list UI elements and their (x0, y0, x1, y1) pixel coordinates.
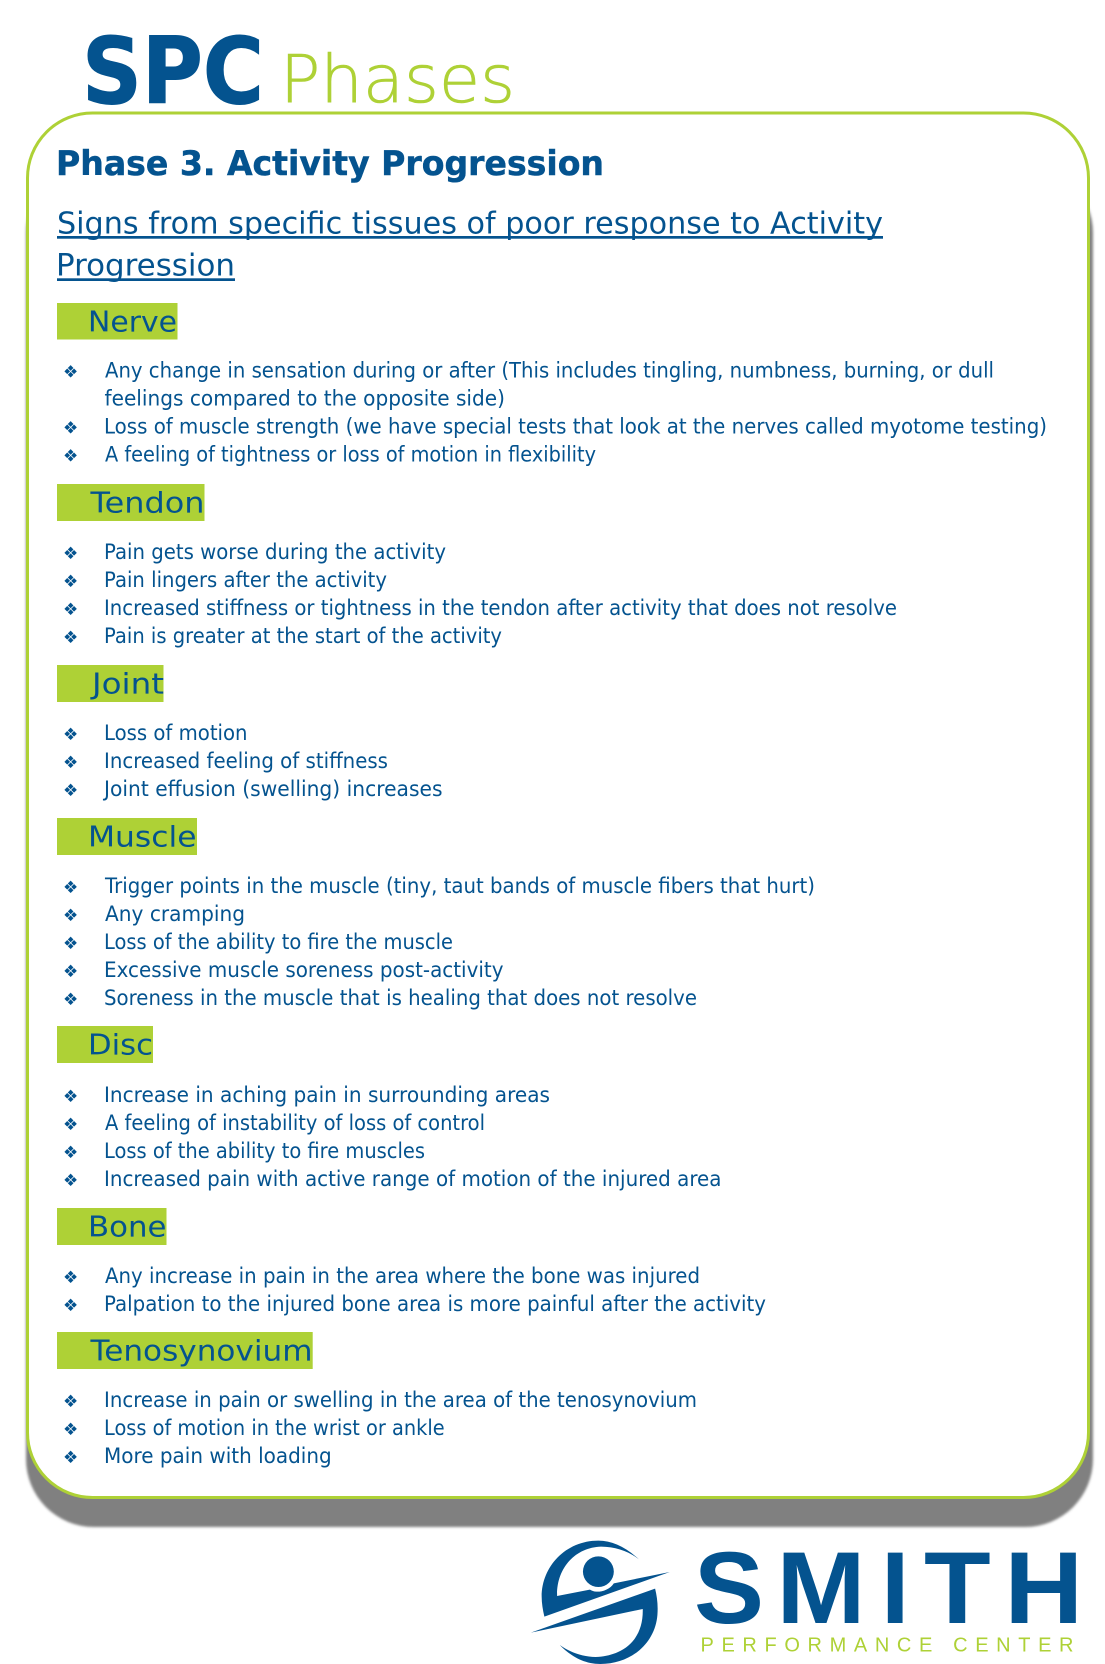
section label: Tenosynovium: Tenosynovium (89, 1334, 312, 1368)
section: Muscle (57, 818, 815, 1010)
Muscle list: ❖ (63, 962, 78, 982)
section label: Bone (57, 1208, 166, 1245)
Bone list: ❖ (63, 1268, 78, 1288)
Joint list: ❖ (63, 781, 78, 801)
Tenosynovium list: ❖ (63, 1420, 78, 1440)
Muscle list: Soreness in the muscle that is healing that does not resolve (104, 986, 697, 1010)
Tenosynovium list (63, 1388, 697, 1468)
Tendon list: ❖ (63, 572, 78, 592)
Tenosynovium list: More pain with loading (104, 1444, 332, 1468)
section: Tenosynovium (57, 1332, 697, 1468)
Bone list: ❖ (63, 1296, 78, 1316)
section label: Nerve (57, 303, 178, 340)
Joint list: ❖ (63, 753, 78, 773)
panel: phase card (28, 113, 1088, 1498)
Disc list: ❖ (63, 1087, 78, 1107)
Disc list: ❖ (63, 1115, 78, 1135)
Joint list: Increased feeling of stiffness (104, 749, 388, 773)
wordmark: SMITH: T (924, 1531, 991, 1645)
section label: Joint: Joint (90, 668, 164, 700)
wordmark: SMITH: M (776, 1531, 866, 1645)
Muscle list: Excessive muscle soreness post-activity (104, 958, 504, 982)
subheading: Progression (56, 248, 235, 284)
Disc list: Loss of the ability to fire muscles (104, 1139, 425, 1163)
Tenosynovium list: ❖ (63, 1392, 78, 1412)
Tendon list (63, 540, 897, 648)
Tendon list: ❖ (63, 600, 78, 620)
section label: Joint (57, 665, 164, 702)
tagline: Performance Center: PERFORMANCE CENTER (700, 1634, 1074, 1656)
Tendon list: Increased stiffness or tightness in the tendon after activity that does not resolve (104, 596, 897, 620)
Disc list (63, 1083, 722, 1191)
Disc list: Increased pain with active range of motion of the injured area (104, 1167, 722, 1191)
section: Tendon (57, 484, 897, 648)
Nerve list (63, 359, 1047, 467)
title: Phases (280, 41, 515, 118)
logo: Smith Performance Center (531, 1531, 1083, 1664)
Muscle list: ❖ (63, 934, 78, 954)
section label: Tendon (57, 484, 204, 521)
Nerve list: ❖ (63, 447, 78, 467)
Tenosynovium list: Loss of motion in the wrist or ankle (104, 1416, 445, 1440)
Tendon list: ❖ (63, 544, 78, 564)
section label: Disc: Disc (88, 1028, 153, 1062)
Disc list: Increase in aching pain in surrounding areas (104, 1083, 550, 1107)
Muscle list: Trigger points in the muscle (tiny, taut bands of muscle fibers that hurt) (104, 874, 815, 898)
Nerve list: A feeling of tightness or loss of motion in flexibility (105, 443, 596, 467)
section: Nerve (57, 303, 1047, 467)
Tendon list: Pain is greater at the start of the activity (104, 624, 502, 648)
subheading: Signs from specific tissues of poor response to Activity (57, 206, 883, 242)
Nerve list: ❖ (63, 419, 78, 439)
Muscle list: ❖ (63, 990, 78, 1010)
section label: Tendon: Tendon (89, 486, 204, 520)
Joint list: ❖ (63, 725, 78, 745)
wordmark: SMITH: S (694, 1531, 764, 1645)
Tenosynovium list: Increase in pain or swelling in the area of the tenosynovium (104, 1388, 697, 1412)
Disc list: ❖ (63, 1171, 78, 1191)
Tendon list: ❖ (63, 628, 78, 648)
Tenosynovium list: ❖ (63, 1448, 78, 1468)
Muscle list: Any cramping (105, 902, 245, 926)
panel: card drop shadow (26, 165, 1093, 1527)
Bone list: Palpation to the injured bone area is more painful after the activity (104, 1292, 766, 1316)
wordmark: SMITH (694, 1531, 1083, 1645)
Disc list: ❖ (63, 1143, 78, 1163)
Muscle list: ❖ (63, 878, 78, 898)
Muscle list: Loss of the ability to fire the muscle (104, 930, 453, 954)
Nerve list: Loss of muscle strength (we have special tests that look at the nerves called myotome testing) (104, 415, 1047, 439)
section label: Muscle (57, 818, 197, 855)
Tendon list: Pain lingers after the activity (104, 568, 387, 592)
title (82, 18, 515, 125)
heading: Phase 3: Phase 3. Activity Progression (56, 144, 604, 184)
Joint list (63, 721, 442, 801)
section: Disc (57, 1026, 722, 1191)
section: Bone (57, 1208, 766, 1316)
Joint list: Joint effusion (swelling) increases (102, 777, 442, 801)
section label: Disc (57, 1026, 153, 1063)
icon: Smith figure (531, 1541, 670, 1664)
Disc list: A feeling of instability of loss of control (105, 1111, 485, 1135)
subheading (56, 206, 883, 284)
Bone list (63, 1264, 766, 1316)
Nerve list: feelings compared to the opposite side) (104, 387, 505, 411)
Tendon list: Pain gets worse during the activity (104, 540, 446, 564)
wordmark: SMITH: I (881, 1531, 909, 1645)
Muscle list (63, 874, 815, 1010)
wordmark: SMITH: H (1004, 1531, 1083, 1645)
section: Joint (57, 665, 442, 801)
Joint list: Loss of motion (104, 721, 248, 745)
Muscle list: ❖ (63, 906, 78, 926)
Nerve list: ❖ (63, 363, 78, 383)
section label: Bone: Bone (88, 1210, 166, 1244)
section label: Muscle: Muscle (88, 820, 196, 854)
title: SPC (82, 18, 264, 125)
Nerve list: Any change in sensation during or after (This includes tingling, numbness, burning, or dull (105, 359, 994, 383)
Bone list: Any increase in pain in the area where the bone was injured (105, 1264, 700, 1288)
section label: Nerve: Nerve (88, 306, 177, 338)
